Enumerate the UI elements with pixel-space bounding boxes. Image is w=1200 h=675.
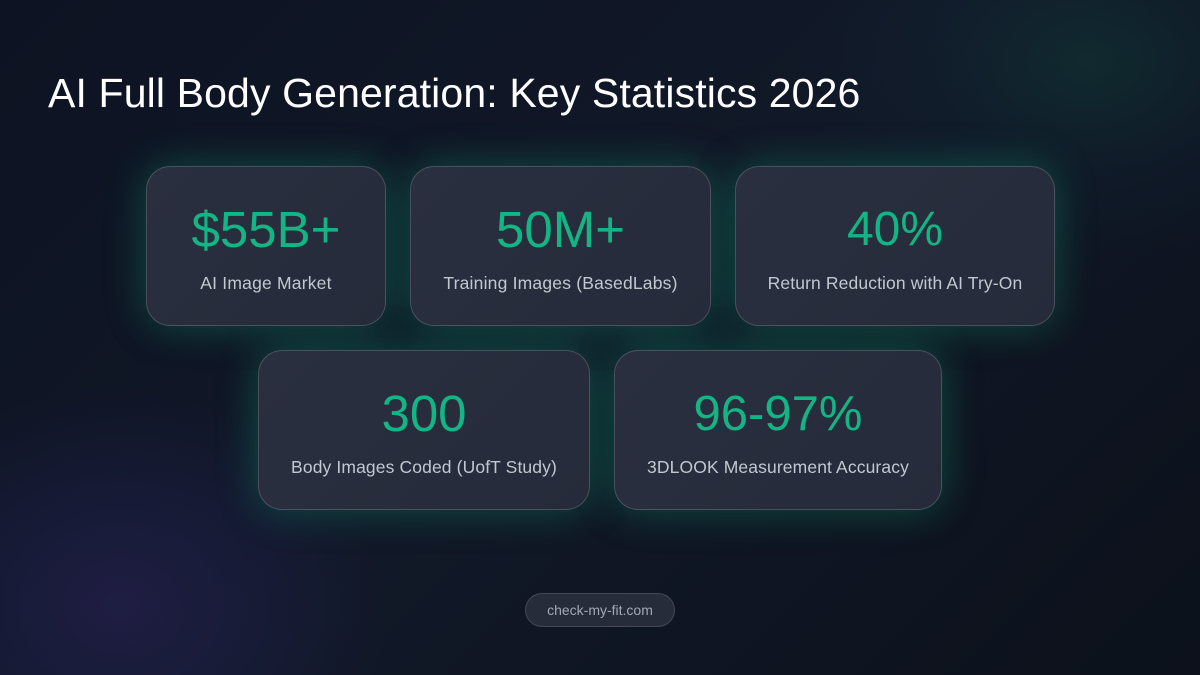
stat value: $55B+ [192, 201, 340, 258]
stat label: Return Reduction with AI Try-On [768, 273, 1022, 293]
stat label: AI Image Market [200, 273, 332, 293]
stat card: training images [410, 166, 711, 326]
stat value: 96-97% [694, 387, 862, 441]
source badge [525, 593, 675, 627]
title: AI Full Body Generation: Key Statistics 2026 [48, 70, 860, 116]
source badge: check-my-fit.com [547, 602, 653, 618]
stat card: measurement accuracy [614, 350, 942, 510]
stat label: Body Images Coded (UofT Study) [291, 457, 557, 477]
stat value: 50M+ [496, 201, 625, 258]
stat value: 300 [381, 385, 467, 442]
stat card: return reduction [735, 166, 1055, 326]
stat label: 3DLOOK Measurement Accuracy [647, 457, 909, 477]
stat card: AI image market [146, 166, 386, 326]
stat card: body images coded [258, 350, 590, 510]
stat label: Training Images (BasedLabs) [443, 273, 678, 293]
stat value: 40% [847, 203, 943, 256]
